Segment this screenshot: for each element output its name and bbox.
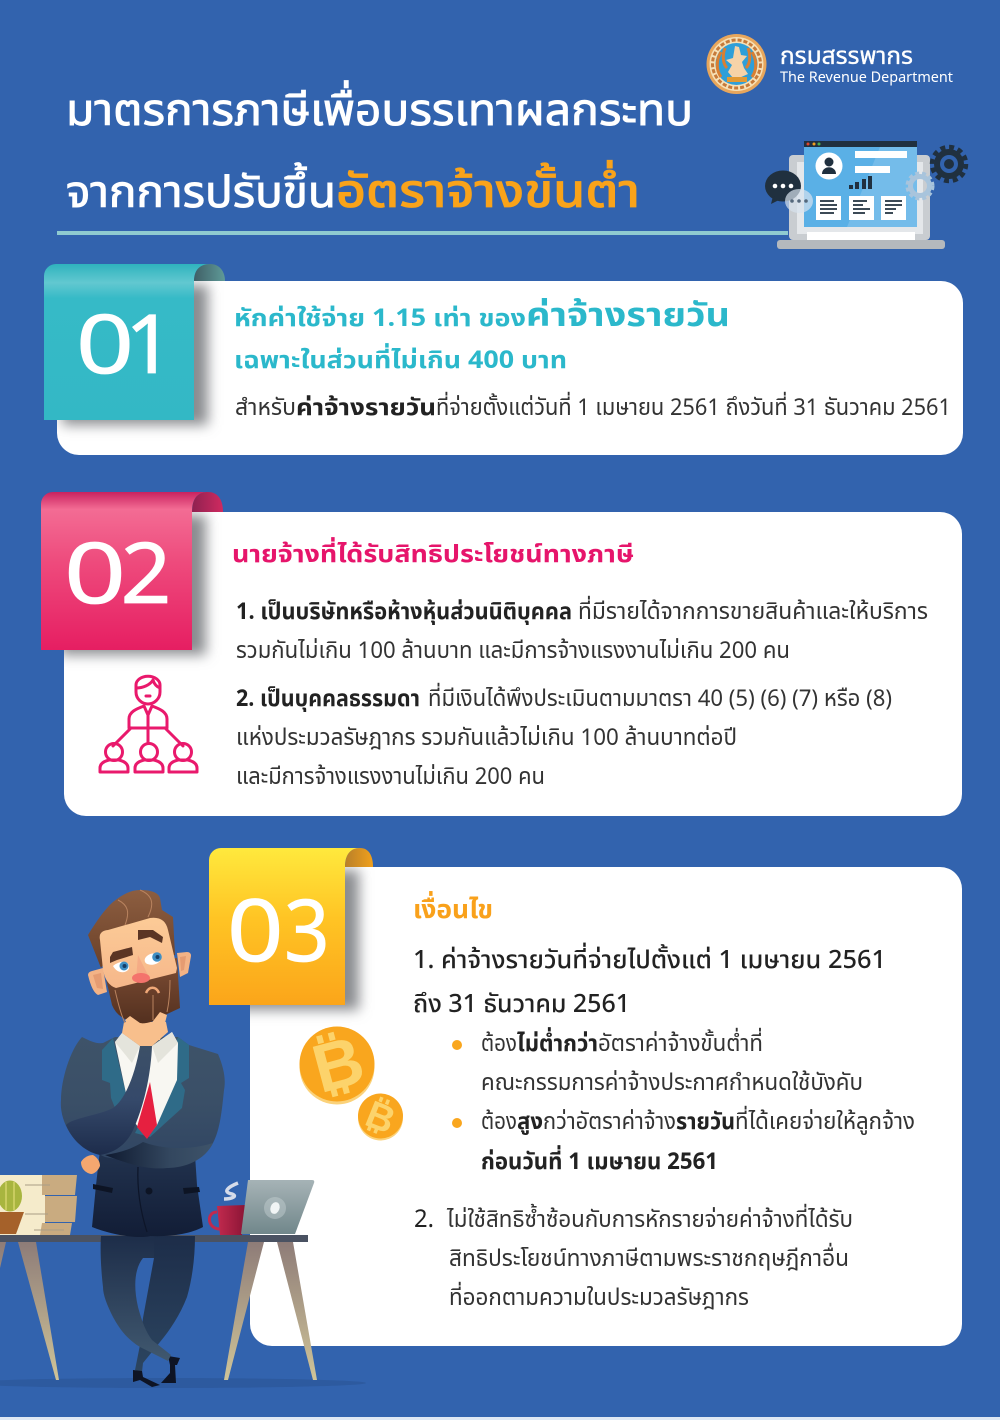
hair — [88, 890, 175, 968]
mug with steam — [209, 1183, 245, 1235]
neck — [122, 1022, 168, 1046]
collar shading — [115, 1032, 178, 1063]
ribbon 02 — [41, 492, 223, 650]
heading 1: หักค่าใช้จ่าย 1.15 เท่า ของ — [234, 301, 526, 337]
bullet 1: ต้อง — [481, 1028, 517, 1062]
divider under title — [57, 231, 788, 235]
item 2.2 — [236, 682, 892, 795]
desk — [0, 1235, 317, 1380]
title: จากการปรับขึ้น — [66, 160, 336, 227]
beard — [103, 958, 180, 1023]
shirt — [115, 1032, 178, 1138]
item 2.1: รวมกันไม่เกิน 100 ล้านบาท และมีการจ้างแรงงานไม่เกิน 200 คน — [236, 635, 790, 669]
back leg — [135, 1236, 195, 1372]
ribbon 03: 3 — [284, 870, 330, 1000]
face — [100, 918, 177, 988]
icon: coins — [300, 1022, 403, 1143]
item 2.1: ที่มีรายได้จากการขายสินค้าและให้บริการ — [578, 595, 928, 630]
icon: coins: B — [360, 1093, 401, 1143]
panel 3: conditions — [209, 848, 962, 1346]
condition 2: 2. — [414, 1201, 434, 1239]
ribbon shadow 2 — [60, 515, 206, 655]
body text 1: ค่าจ้างรายวัน — [296, 392, 436, 426]
heading 3: เงื่อนไข — [413, 890, 493, 930]
condition 1: ถึง 31 ธันวาคม 2561 — [413, 986, 630, 1024]
item 2.1 — [236, 595, 928, 669]
eyes — [113, 951, 163, 972]
heading 1: ค่าจ้างรายวัน — [526, 291, 730, 341]
item 2.2: 2. เป็นบุคคลธรรมดา — [236, 683, 420, 717]
mouth — [146, 988, 159, 993]
item 2.2: ที่มีเงินได้พึงประเมินตามมาตรา 40 (5) (6) (7) หรือ (8) — [428, 682, 892, 717]
condition 1: 1. ค่าจ้างรายวันที่จ่ายไปตั้งแต่ 1 เมษายน 2561 — [413, 942, 886, 980]
body text 1: สำหรับ — [235, 392, 296, 426]
logo wordmark: กรมสรรพากร — [780, 39, 913, 75]
jacket — [92, 1150, 203, 1237]
ears — [88, 952, 191, 995]
tie — [137, 1082, 157, 1139]
bullet 1: อัตราค่าจ้างขั้นต่ำที่ — [598, 1027, 763, 1062]
icon: coins: B — [305, 1022, 372, 1108]
shoes — [133, 1356, 180, 1387]
ribbon shadow 3 — [250, 867, 368, 1019]
condition 1 — [413, 942, 886, 1024]
eyebrows — [110, 930, 163, 963]
bullet 2: ต้อง — [481, 1106, 517, 1140]
fist — [81, 1155, 100, 1174]
bottom edge — [0, 1417, 1000, 1420]
bullet 2 — [452, 1105, 915, 1180]
heading 1: เฉพาะในส่วนที่ไม่เกิน 400 บาท — [234, 343, 567, 379]
lower folded arm — [105, 1142, 213, 1168]
bullet 2: ที่ได้เคยจ่ายให้ลูกจ้าง — [735, 1105, 915, 1140]
jacket seam, pockets and button — [93, 1167, 200, 1232]
paper stack — [0, 1175, 77, 1235]
bullet 2: กว่าอัตราค่าจ้าง — [543, 1106, 676, 1140]
condition 2 — [414, 1201, 853, 1316]
heading 2: นายจ้างที่ได้รับสิทธิประโยชน์ทางภาษี — [232, 537, 634, 573]
front leg — [101, 1236, 171, 1361]
suit torso and arms — [61, 1037, 225, 1168]
ribbon 01 — [44, 264, 225, 420]
laptop — [241, 1180, 314, 1234]
body text 1: ที่จ่ายตั้งแต่วันที่ 1 เมษายน 2561 ถึงวันที่ 31 ธันวาคม 2561 — [436, 391, 951, 426]
lapels — [102, 1037, 189, 1137]
title — [66, 78, 693, 228]
ribbon 03: 0 — [227, 870, 284, 1000]
ribbon 02: 2 — [120, 514, 172, 641]
bullet 2: สูง — [517, 1106, 543, 1140]
icon: people hierarchy — [100, 676, 197, 772]
logo wordmark — [780, 39, 953, 89]
item 2.1: 1. เป็นบริษัทหรือห้างหุ้นส่วนนิติบุคคล — [236, 596, 572, 630]
condition 2: ไม่ใช้สิทธิซ้ำซ้อนกับการหักรายจ่ายค่าจ้างที่ได้รับ — [446, 1203, 853, 1238]
ribbon 01: 0 — [76, 288, 134, 410]
bullet 1: คณะกรรมการค่าจ้างประกาศกำหนดใช้บังคับ — [481, 1067, 863, 1101]
nose — [132, 955, 150, 983]
ribbon shadow 1 — [62, 285, 208, 425]
ribbon 02: 0 — [64, 514, 126, 641]
icon: laptop dashboard — [765, 141, 966, 249]
item 2.2: แห่งประมวลรัษฎากร รวมกันแล้วไม่เกิน 100 ล้านบาทต่อปี — [236, 722, 737, 756]
panel 1: deduction — [44, 264, 963, 455]
condition 2: ที่ออกตามความในประมวลรัษฎากร — [449, 1281, 749, 1316]
ribbon 01: 1 — [125, 288, 174, 410]
item 2.2: และมีการจ้างแรงงานไม่เกิน 200 คน — [236, 761, 545, 795]
title: มาตรการภาษีเพื่อบรรเทาผลกระทบ — [66, 78, 693, 145]
condition 2: สิทธิประโยชน์ทางภาษีตามพระราชกฤษฎีกาอื่น — [449, 1242, 849, 1277]
logo wordmark: The Revenue Department — [780, 67, 953, 89]
title: อัตราจ้างขั้นต่ำ — [336, 158, 640, 228]
logo: Revenue Department seal — [706, 34, 766, 94]
illustration: thinking businessman at desk — [0, 890, 366, 1388]
floor shadow — [0, 1378, 366, 1388]
ribbon 03 — [209, 848, 373, 1005]
hair and beard lines — [115, 890, 170, 1023]
panel 2: eligible employers — [41, 492, 962, 816]
bullet 1: ไม่ต่ำกว่า — [517, 1027, 598, 1062]
chin fingers — [125, 1012, 167, 1040]
body text 1 — [235, 391, 951, 426]
bullet 1 — [452, 1027, 863, 1101]
cactus — [0, 1180, 24, 1234]
bullet 2: ก่อนวันที่ 1 เมษายน 2561 — [481, 1145, 718, 1180]
forearm raised to chin — [66, 1046, 152, 1155]
bullet 2: รายวัน — [676, 1106, 735, 1140]
heading 1 — [234, 291, 730, 379]
